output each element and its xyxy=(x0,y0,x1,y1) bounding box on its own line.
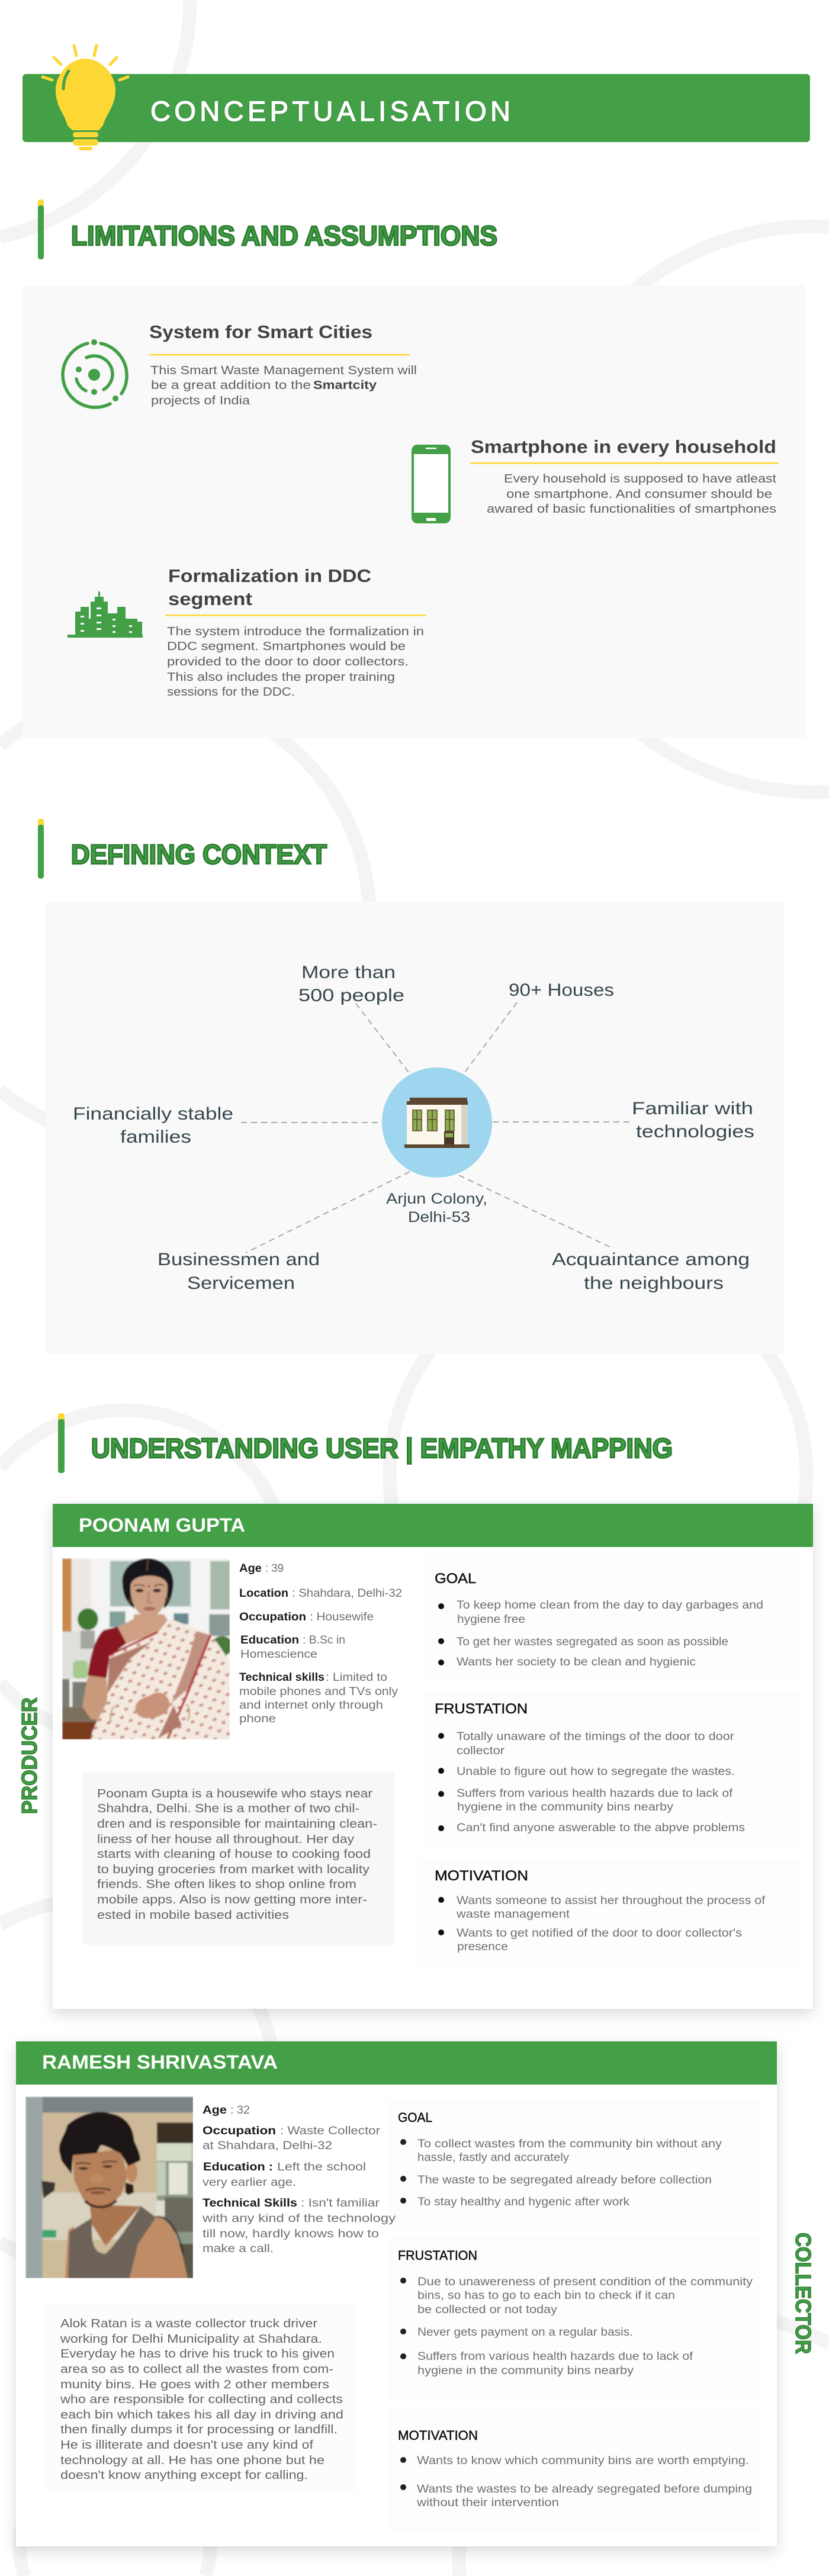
item: formalization in ddc segment: DDC segment. Smartphones would be xyxy=(167,640,406,653)
persona details: ramesh: Occupation xyxy=(203,2125,276,2137)
label: businessmen and servicemen xyxy=(158,1250,320,1293)
section: poonam goal: To keep home clean from the day to day garbages and xyxy=(457,1599,763,1612)
persona details: ramesh: very earlier age. xyxy=(203,2176,296,2189)
section: poonam goal: GOAL xyxy=(435,1571,476,1587)
item: system for smart cities xyxy=(149,321,417,407)
section: poonam motivation: MOTIVATION xyxy=(435,1868,528,1884)
panel: defining context diagram xyxy=(45,902,784,1354)
persona details: ramesh: till now, hardly knows how to xyxy=(203,2228,379,2240)
item: smartphone in every household: one smartphone. And consumer should be xyxy=(506,488,772,501)
item: system for smart cities: be a great addition to the xyxy=(151,379,311,392)
item: formalization in ddc segment: This also includes the proper training xyxy=(167,671,395,684)
bio box: ramesh xyxy=(46,2304,357,2491)
section: ramesh goal: GOAL xyxy=(398,2110,432,2125)
item: system for smart cities: projects of India xyxy=(151,394,250,407)
section: poonam motivation: presence xyxy=(457,1941,508,1953)
bio box: poonam: Shahdra, Delhi. She is a mother of two chil- xyxy=(97,1802,359,1815)
icon: light bulb xyxy=(43,46,128,150)
bio box: poonam: starts with cleaning of house to cooking food xyxy=(97,1848,371,1861)
label: producer: PRODUCER xyxy=(17,1697,41,1814)
bio box: poonam: ested in mobile based activities xyxy=(97,1909,289,1922)
item: formalization in ddc segment: provided to the door to door collectors. xyxy=(167,655,409,668)
card header: poonam gupta: POONAM GUPTA xyxy=(79,1514,245,1536)
persona details: poonam: : Limited to xyxy=(326,1671,387,1684)
section: poonam frustration: hygiene in the community bins nearby xyxy=(457,1801,674,1813)
bio box: ramesh: technology at all. He has one phone but he xyxy=(60,2454,324,2467)
label: more than 500 people: 500 people xyxy=(298,986,404,1005)
title banner: CONCEPTUALISATION xyxy=(150,95,510,127)
persona details: poonam: Technical skills xyxy=(239,1671,324,1684)
label: acquaintance among the neighbours: the neighbours xyxy=(584,1273,724,1293)
section: poonam motivation xyxy=(417,1860,802,1968)
persona details: ramesh: Technical Skills xyxy=(203,2197,297,2210)
persona details: ramesh: with any kind of the technology xyxy=(202,2212,396,2225)
item: smartphone in every household: Every household is supposed to have atleast xyxy=(504,472,776,485)
bio box: poonam xyxy=(82,1773,394,1945)
section: ramesh goal: To stay healthy and hygenic after work xyxy=(417,2196,630,2208)
section: poonam frustration: Suffers from various health hazards due to lack of xyxy=(457,1787,733,1800)
persona details: poonam: phone xyxy=(239,1713,276,1725)
section: ramesh motivation: Wants the wastes to be already segregated before dumping xyxy=(417,2483,752,2495)
persona details: ramesh: : 32 xyxy=(230,2104,250,2117)
card header: poonam gupta xyxy=(53,1504,813,1547)
persona details: poonam: : B.Sc in xyxy=(303,1634,345,1646)
bio box: poonam: friends. She often likes to shop online from xyxy=(97,1878,356,1891)
bio box: poonam: Poonam Gupta is a housewife who stays near xyxy=(97,1787,372,1800)
label: familiar with technologies: technologies xyxy=(636,1122,754,1141)
label: acquaintance among the neighbours xyxy=(552,1250,750,1293)
card: poonam gupta persona xyxy=(53,1504,813,2009)
persona details: ramesh: Age xyxy=(203,2104,227,2117)
section: poonam goal: Wants her society to be clean and hygienic xyxy=(457,1656,696,1668)
persona details: ramesh: at Shahdara, Delhi-32 xyxy=(203,2140,332,2152)
heading: defining context: DEFINING CONTEXT xyxy=(71,839,327,870)
bio box: poonam: dren and is responsible for maintaining clean- xyxy=(97,1818,377,1831)
section: ramesh frustration: Never gets payment on a regular basis. xyxy=(417,2326,633,2339)
bio box: ramesh: working for Delhi Municipality at Shahdara. xyxy=(60,2333,322,2346)
section: poonam goal xyxy=(422,1554,802,1681)
section: poonam goal: To get her wastes segregated as soon as possible xyxy=(457,1636,728,1648)
persona details: poonam: mobile phones and TVs only xyxy=(239,1686,399,1698)
section: poonam frustration: Can't find anyone aswerable to the abpve problems xyxy=(457,1822,745,1834)
label: acquaintance among the neighbours: Acquaintance among xyxy=(552,1250,750,1269)
woman xyxy=(82,1674,109,1720)
persona details: ramesh: : Isn't familiar xyxy=(301,2197,380,2210)
section: poonam motivation: waste management xyxy=(456,1908,570,1921)
panel: limitations and assumptions xyxy=(23,285,806,738)
bio box: poonam: to buying groceries from market with locality xyxy=(97,1863,369,1876)
card header: ramesh shrivastava xyxy=(16,2041,777,2085)
persona details: ramesh: Left the school xyxy=(277,2161,366,2173)
label: arjun colony: Delhi-53 xyxy=(408,1209,470,1226)
label: familiar with technologies xyxy=(632,1099,754,1141)
icon: city skyline xyxy=(68,591,143,638)
heading: understanding user empathy mapping xyxy=(58,1413,673,1473)
bio box: ramesh: Everyday he has to drive his truck to his given xyxy=(60,2347,335,2360)
label: businessmen and servicemen: Servicemen xyxy=(187,1273,295,1293)
item: formalization in ddc segment: The system introduce the formalization in xyxy=(167,625,424,638)
label: more than 500 people xyxy=(298,963,404,1005)
item: formalization in ddc segment xyxy=(165,565,426,699)
icon: smart city rings xyxy=(63,339,127,407)
item: smartphone in every household: Smartphone in every household xyxy=(471,436,776,457)
persona details: ramesh: Education : xyxy=(203,2161,273,2173)
photo: poonam gupta xyxy=(62,1558,233,1739)
persona details: poonam: Location xyxy=(239,1587,288,1600)
label: financially stable families xyxy=(73,1104,233,1147)
photo: ramesh shrivastava xyxy=(25,2097,194,2278)
title banner xyxy=(23,74,810,142)
bio box: poonam: liness of her house all throughout. Her day xyxy=(97,1833,354,1846)
persona details: poonam xyxy=(239,1562,402,1725)
section: ramesh goal xyxy=(387,2099,762,2227)
label: more than 500 people: More than xyxy=(301,963,396,982)
item: system for smart cities: Smartcity xyxy=(313,379,377,392)
section: ramesh frustration xyxy=(387,2236,762,2400)
man xyxy=(65,2226,75,2278)
section: ramesh motivation: Wants to know which community bins are worth emptying. xyxy=(417,2455,749,2467)
persona details: ramesh xyxy=(202,2104,396,2255)
label: financially stable families: Financially stable xyxy=(73,1104,233,1124)
section: poonam frustration: FRUSTATION xyxy=(435,1701,528,1717)
persona details: poonam: Occupation xyxy=(239,1611,306,1623)
section: ramesh motivation: without their intervention xyxy=(416,2497,559,2509)
section: ramesh goal: The waste to be segregated already before collection xyxy=(417,2174,712,2186)
bio box: ramesh: then finally dumps it for processing or landfill. xyxy=(60,2423,338,2436)
section: ramesh frustration: be collected or not today xyxy=(417,2304,558,2316)
section: ramesh frustration: Suffers from various health hazards due to lack of xyxy=(417,2350,693,2363)
persona details: poonam: : Shahdara, Delhi-32 xyxy=(292,1587,402,1600)
bio box: poonam: mobile apps. Also is now getting more inter- xyxy=(97,1893,367,1906)
persona details: ramesh: make a call. xyxy=(203,2243,274,2255)
item: formalization in ddc segment: Formalization in DDC xyxy=(168,565,371,586)
bio box: ramesh: munity bins. He goes with 2 other members xyxy=(60,2378,329,2391)
bio box: ramesh: who are responsible for collecting and collects xyxy=(60,2393,343,2406)
item: system for smart cities: This Smart Waste Management System will xyxy=(150,364,417,377)
heading: limitations and assumptions: LIMITATIONS AND ASSUMPTIONS xyxy=(71,220,497,251)
section: poonam frustration: Totally unaware of the timings of the door to door xyxy=(457,1731,735,1743)
section: poonam frustration xyxy=(422,1692,802,1850)
bio box: ramesh: area so as to collect all the wastes from com- xyxy=(60,2363,333,2376)
item: system for smart cities: System for Smart Cities xyxy=(149,321,372,342)
bio box: ramesh: each bin which takes his all day in driving and xyxy=(60,2408,343,2421)
persona details: poonam: and internet only through xyxy=(239,1699,383,1712)
section: ramesh frustration: hygiene in the community bins nearby xyxy=(417,2365,634,2377)
section: ramesh goal: To collect wastes from the community bin without any xyxy=(417,2138,722,2150)
persona details: poonam: : Housewife xyxy=(310,1611,374,1623)
label: arjun colony: Arjun Colony, xyxy=(386,1191,487,1207)
persona details: poonam: Age xyxy=(239,1562,262,1575)
card: ramesh shrivastava persona xyxy=(16,2041,777,2546)
section: ramesh goal: hassle, fastly and accurately xyxy=(417,2152,570,2164)
section: poonam motivation: Wants someone to assist her throughout the process of xyxy=(457,1895,766,1907)
persona details: poonam: : 39 xyxy=(265,1562,284,1575)
item: smartphone in every household: awared of basic functionalities of smartphones xyxy=(487,503,776,516)
section: ramesh motivation: MOTIVATION xyxy=(398,2428,478,2443)
section: poonam frustration: collector xyxy=(457,1745,505,1757)
section: poonam goal: hygiene free xyxy=(457,1613,525,1626)
section: ramesh frustration: FRUSTATION xyxy=(398,2248,477,2263)
icon: smartphone xyxy=(412,445,451,523)
label: arjun colony xyxy=(386,1191,487,1226)
section: poonam frustration: Unable to figure out how to segregate the wastes. xyxy=(457,1765,735,1778)
section: ramesh frustration: Due to unawereness of present condition of the community xyxy=(417,2276,753,2288)
heading: understanding user empathy mapping: UNDERSTANDING USER | EMPATHY MAPPING xyxy=(91,1433,673,1464)
item: formalization in ddc segment: segment xyxy=(168,588,252,609)
item: formalization in ddc segment: sessions for the DDC. xyxy=(167,686,295,699)
persona details: poonam: Homescience xyxy=(240,1648,317,1661)
section: ramesh frustration: bins, so has to go to each bin to check if it can xyxy=(417,2289,675,2302)
label: financially stable families: families xyxy=(120,1127,191,1147)
label: collector: COLLECTOR xyxy=(791,2233,815,2354)
section: poonam motivation: Wants to get notified of the door to door collector's xyxy=(457,1927,742,1940)
heading: limitations and assumptions xyxy=(38,200,497,259)
bio box: ramesh: doesn't know anything except for calling. xyxy=(60,2469,308,2482)
item: smartphone in every household xyxy=(470,436,779,516)
label: 90+ houses: 90+ Houses xyxy=(509,980,614,1000)
bio box: ramesh: Alok Ratan is a waste collector truck driver xyxy=(60,2317,317,2330)
heading: defining context xyxy=(38,819,327,879)
card header: ramesh shrivastava: RAMESH SHRIVASTAVA xyxy=(42,2051,278,2073)
persona details: poonam: Education xyxy=(240,1634,299,1646)
icon: house in circle xyxy=(382,1067,492,1178)
section: ramesh motivation xyxy=(387,2408,762,2532)
bio box: ramesh: He is illiterate and doesn't use any kind of xyxy=(60,2439,314,2452)
label: businessmen and servicemen: Businessmen and xyxy=(158,1250,320,1269)
persona details: ramesh: : Waste Collector xyxy=(280,2125,381,2137)
label: familiar with technologies: Familiar with xyxy=(632,1099,753,1118)
